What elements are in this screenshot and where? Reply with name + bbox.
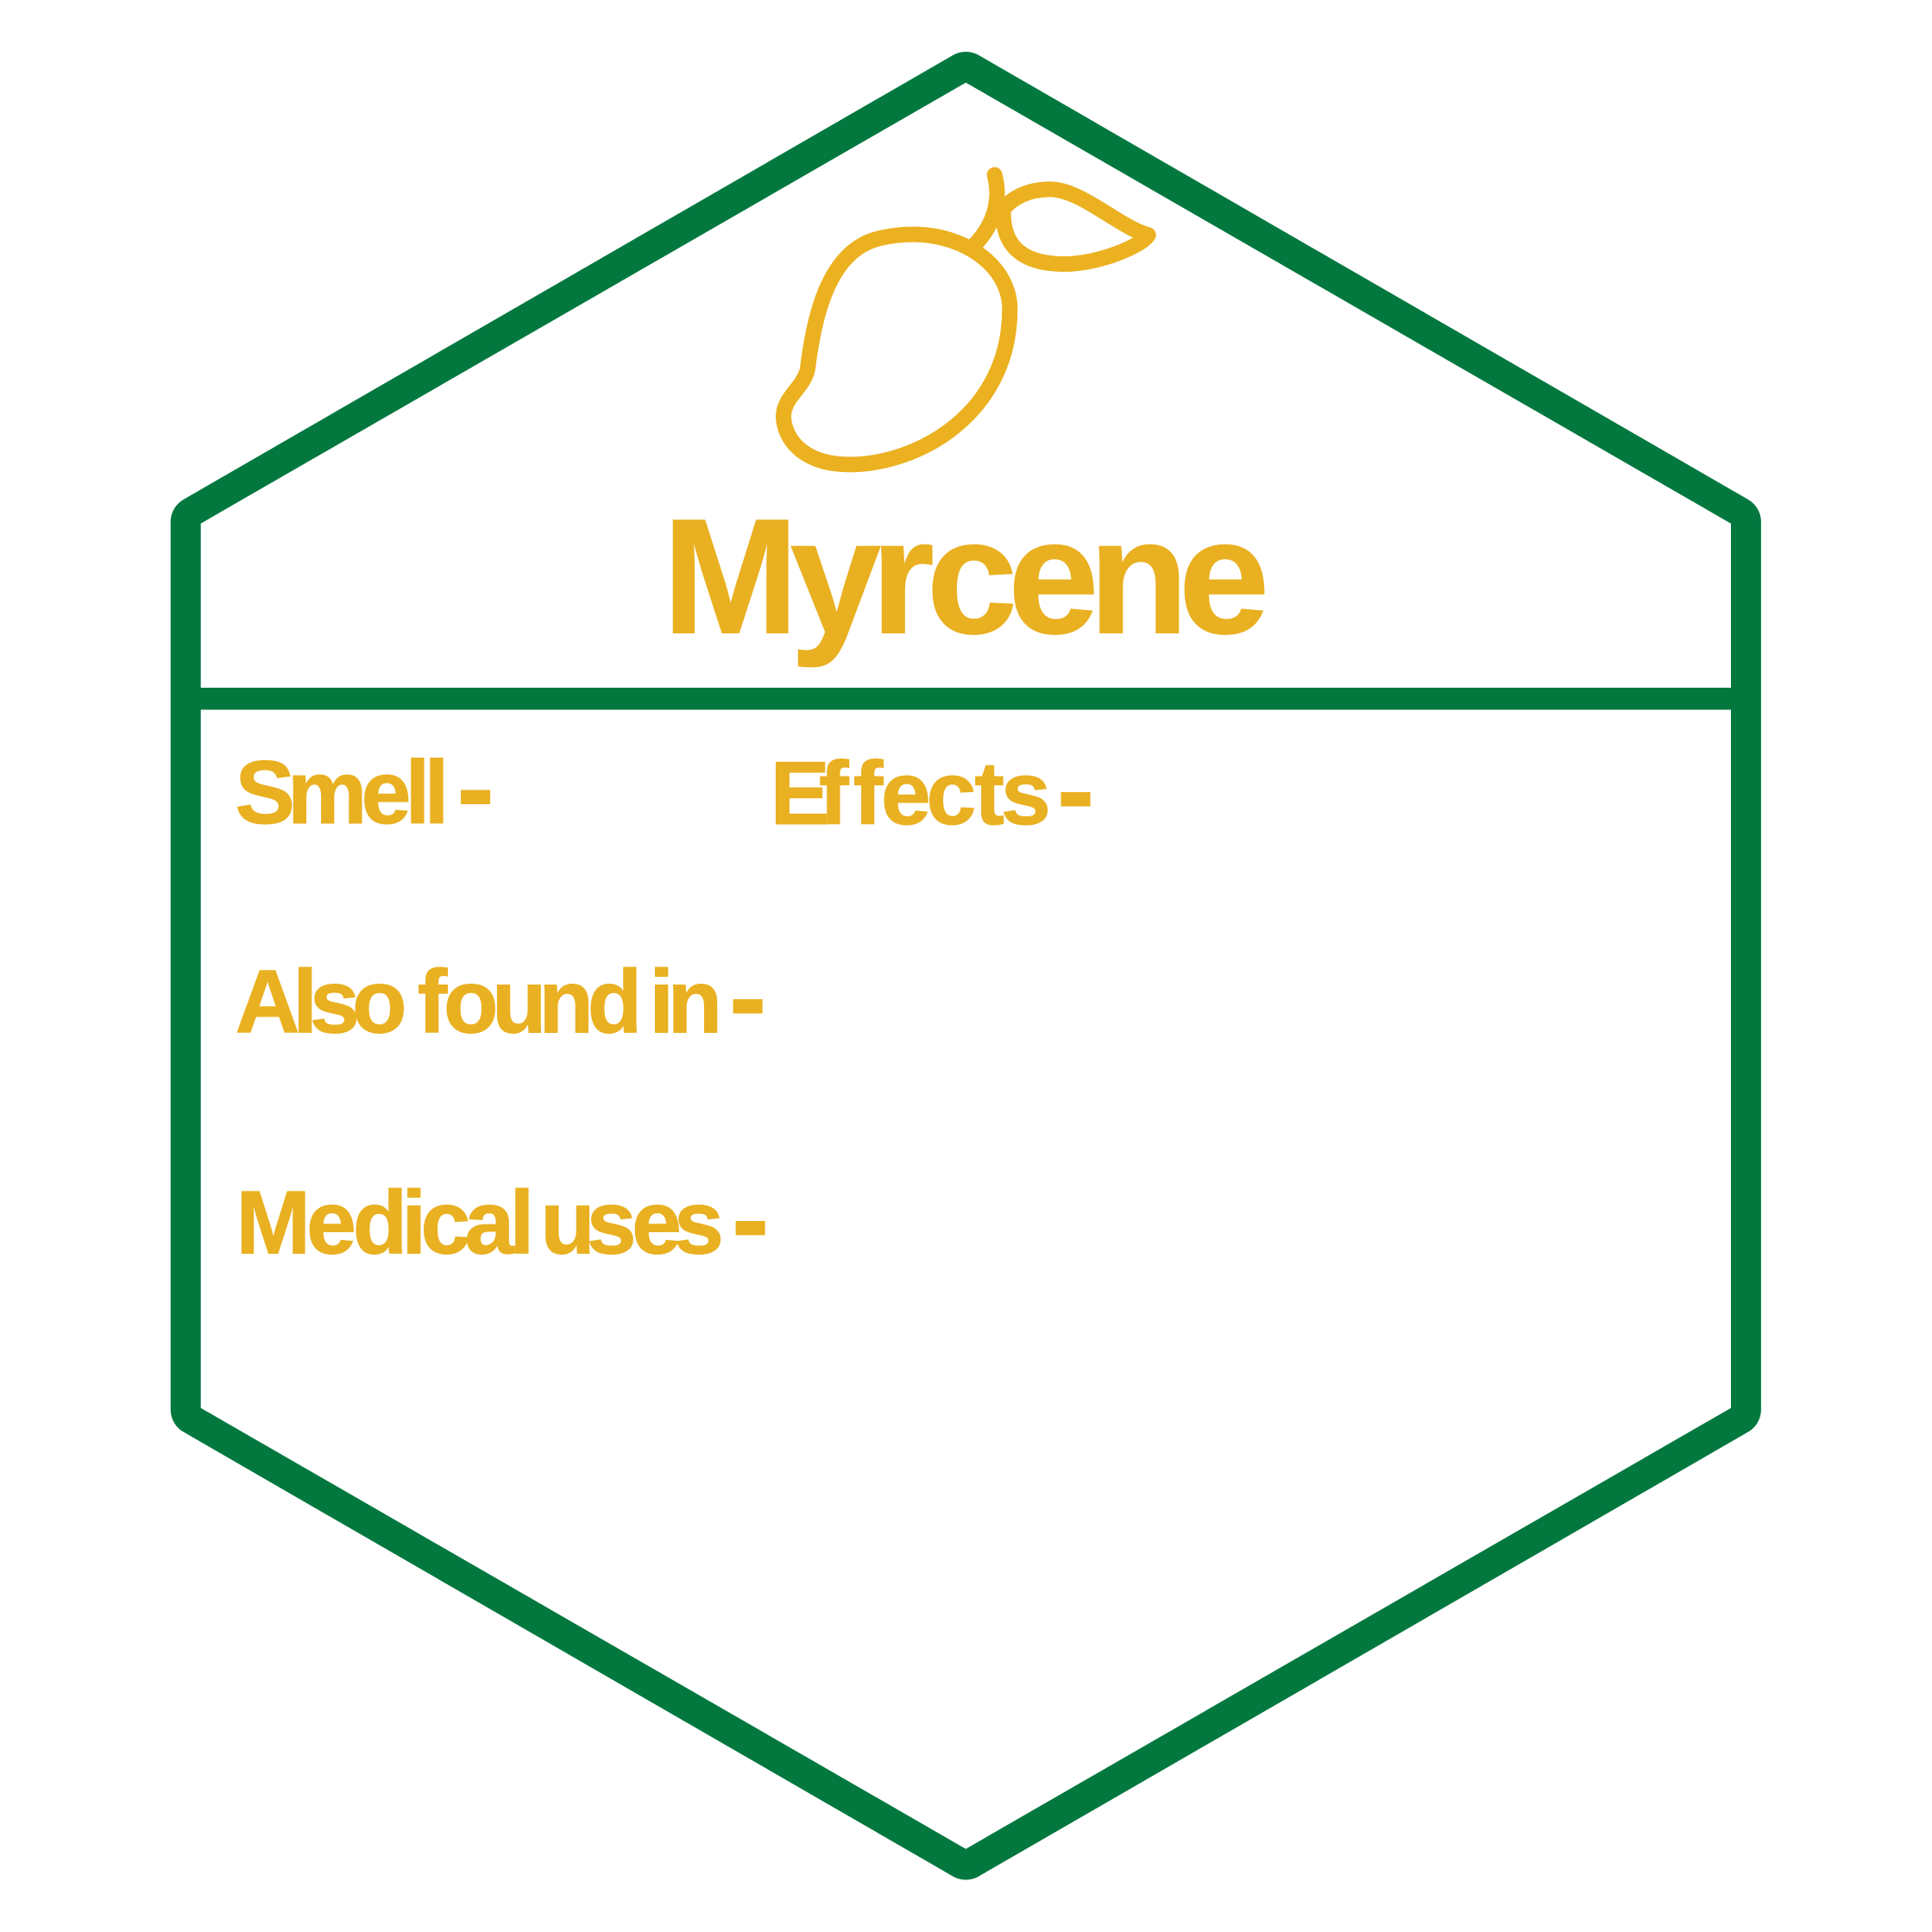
divider bar bbox=[200, 688, 1732, 709]
label: effects: Effects bbox=[770, 744, 1051, 844]
label: effects: - bbox=[1057, 727, 1094, 853]
title: Myrcene bbox=[663, 485, 1269, 668]
icon: mango with leaf bbox=[783, 175, 1149, 464]
label: smell: - bbox=[457, 725, 494, 851]
label: also found in: - bbox=[729, 934, 766, 1060]
label: smell: Smell bbox=[235, 743, 450, 843]
label: medical uses: - bbox=[732, 1155, 769, 1281]
label: medical uses: Medical uses bbox=[236, 1174, 724, 1274]
label: also found in: Also found in bbox=[235, 953, 722, 1053]
hexagon frame bbox=[171, 52, 1761, 1879]
